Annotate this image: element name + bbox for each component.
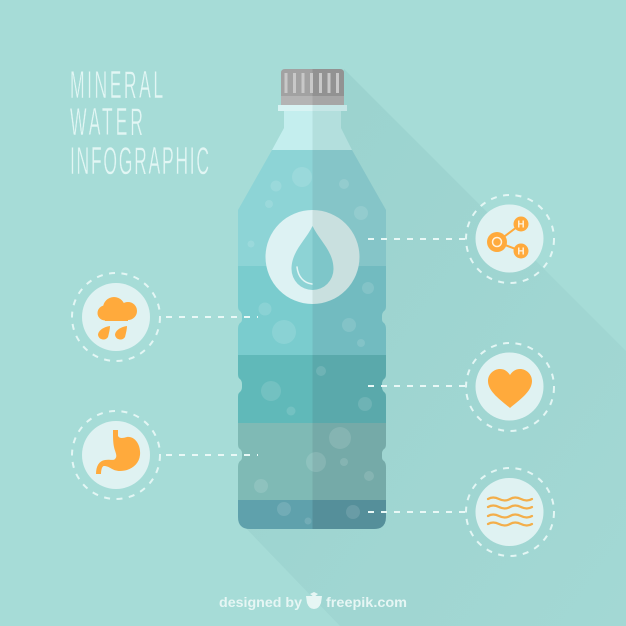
footer credit: freepik.com <box>326 595 407 610</box>
icon: rain cloud <box>72 273 160 361</box>
bubbles <box>248 167 374 524</box>
footer credit <box>219 592 407 610</box>
icon: heart <box>466 343 554 431</box>
icon: water molecule: H <box>517 246 525 258</box>
long shadow of bottle <box>238 69 626 626</box>
title <box>70 64 209 183</box>
bottle <box>238 69 386 529</box>
icon: water molecule: H <box>517 220 525 230</box>
icon: waves <box>466 468 554 556</box>
footer credit: designed by <box>219 595 303 610</box>
title: WATER <box>70 101 143 144</box>
connector lines <box>166 239 466 512</box>
title: MINERAL <box>70 64 163 107</box>
cap <box>281 69 344 105</box>
bottle ring <box>278 105 312 111</box>
label circle with water drop <box>265 210 359 304</box>
icon: freepik logo <box>306 592 322 609</box>
icon: water molecule <box>466 195 554 283</box>
title: INFOGRAPHIC <box>70 140 209 183</box>
icon: stomach <box>72 411 160 499</box>
bottle body with water bands <box>238 111 386 529</box>
